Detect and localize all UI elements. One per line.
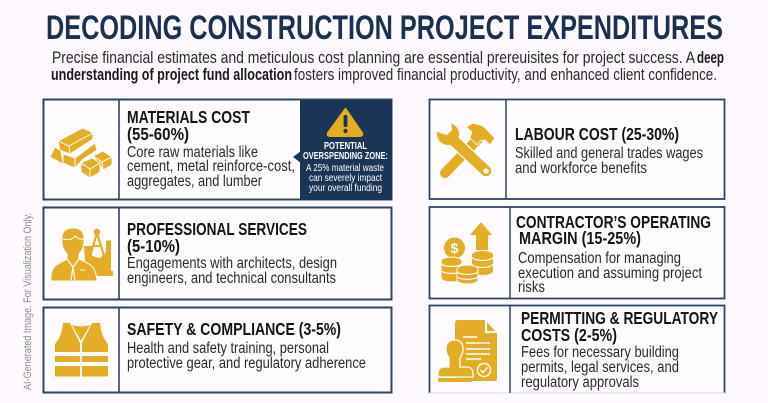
coin stack: left	[441, 257, 462, 282]
icon: coins and arrow	[441, 222, 493, 284]
icon: gold bars	[50, 128, 112, 178]
panel: safety and compliance	[44, 307, 392, 393]
percentage: permitting and regulatory costs: COSTS (2-5%)	[521, 325, 617, 345]
callout: overspending zone: A 25% material waste	[306, 162, 384, 174]
description: professional services: engineers, and technical consultants	[127, 270, 336, 287]
intro text: deep	[697, 49, 724, 67]
heading: safety and compliance: SAFETY & COMPLIANCE (3-5%)	[127, 319, 341, 339]
description: contractor's operating margin: Compensation for managing	[518, 250, 681, 267]
icon: wrench and hammer	[434, 118, 495, 174]
callout: overspending zone: can severely impact	[309, 172, 382, 184]
description: contractor's operating margin: execution and assuming project	[518, 265, 703, 282]
description: labour cost: and workforce benefits	[515, 160, 647, 177]
heading: contractor's operating margin: CONTRACTOR’S OPERATING	[516, 212, 711, 232]
percentage: contractor's operating margin: MARGIN (15-25%)	[519, 228, 641, 248]
icon: safety vest	[55, 323, 108, 376]
heading: professional services: PROFESSIONAL SERVICES	[127, 219, 307, 239]
icon: professional	[51, 228, 113, 281]
percentage: professional services: (5-10%)	[127, 236, 180, 256]
intro text: understanding of project fund allocation	[51, 66, 292, 84]
panel: permitting and regulatory costs	[429, 305, 725, 393]
description: contractor's operating margin	[518, 250, 703, 296]
description: materials cost: Core raw materials like	[127, 144, 258, 161]
panel: contractor's operating margin	[430, 207, 724, 299]
coin stack: right	[472, 251, 493, 275]
description: materials cost: cement, metal reinforce-cost,	[127, 158, 295, 175]
panel: materials cost	[44, 99, 392, 200]
heading: materials cost: MATERIALS COST	[127, 107, 250, 127]
side note: AI-Generated Image. For Visualization Only.	[22, 213, 34, 390]
icon: warning triangle	[328, 109, 362, 136]
description: contractor's operating margin: risks	[518, 279, 545, 296]
callout: overspending zone: your overall funding	[309, 182, 382, 194]
description: professional services	[127, 255, 337, 287]
panel: labour cost	[430, 99, 724, 199]
description: materials cost	[127, 144, 295, 190]
icon: coins and arrow: $	[451, 240, 459, 256]
percentage: materials cost: (55-60%)	[127, 124, 189, 144]
icon: document and stamp	[438, 319, 498, 382]
intro text	[51, 49, 724, 84]
description: labour cost	[515, 145, 703, 177]
description: labour cost: Skilled and general trades wages	[515, 145, 703, 162]
callout: overspending zone: OVERSPENDING ZONE:	[303, 150, 388, 162]
description: professional services: Engagements with architects, design	[127, 255, 337, 272]
coin stack: middle	[457, 265, 478, 284]
description: safety and compliance: Health and safety training, personal	[127, 340, 329, 357]
description: permitting and regulatory costs: Fees for necessary building	[521, 344, 679, 361]
description: safety and compliance: protective gear, and regulatory adherence	[127, 355, 366, 372]
panel: professional services	[44, 207, 392, 300]
callout: overspending zone	[293, 100, 392, 200]
callout: overspending zone: POTENTIAL	[324, 140, 367, 152]
heading: permitting and regulatory costs: PERMITTING & REGULATORY	[521, 308, 718, 328]
description: permitting and regulatory costs: permits, legal services, and	[521, 359, 679, 376]
description: materials cost: aggregates, and lumber	[127, 173, 262, 190]
description: permitting and regulatory costs: regulatory approvals	[521, 374, 639, 391]
description: permitting and regulatory costs	[521, 344, 679, 391]
heading: labour cost: LABOUR COST (25-30%)	[515, 124, 679, 144]
description: safety and compliance	[127, 340, 366, 372]
